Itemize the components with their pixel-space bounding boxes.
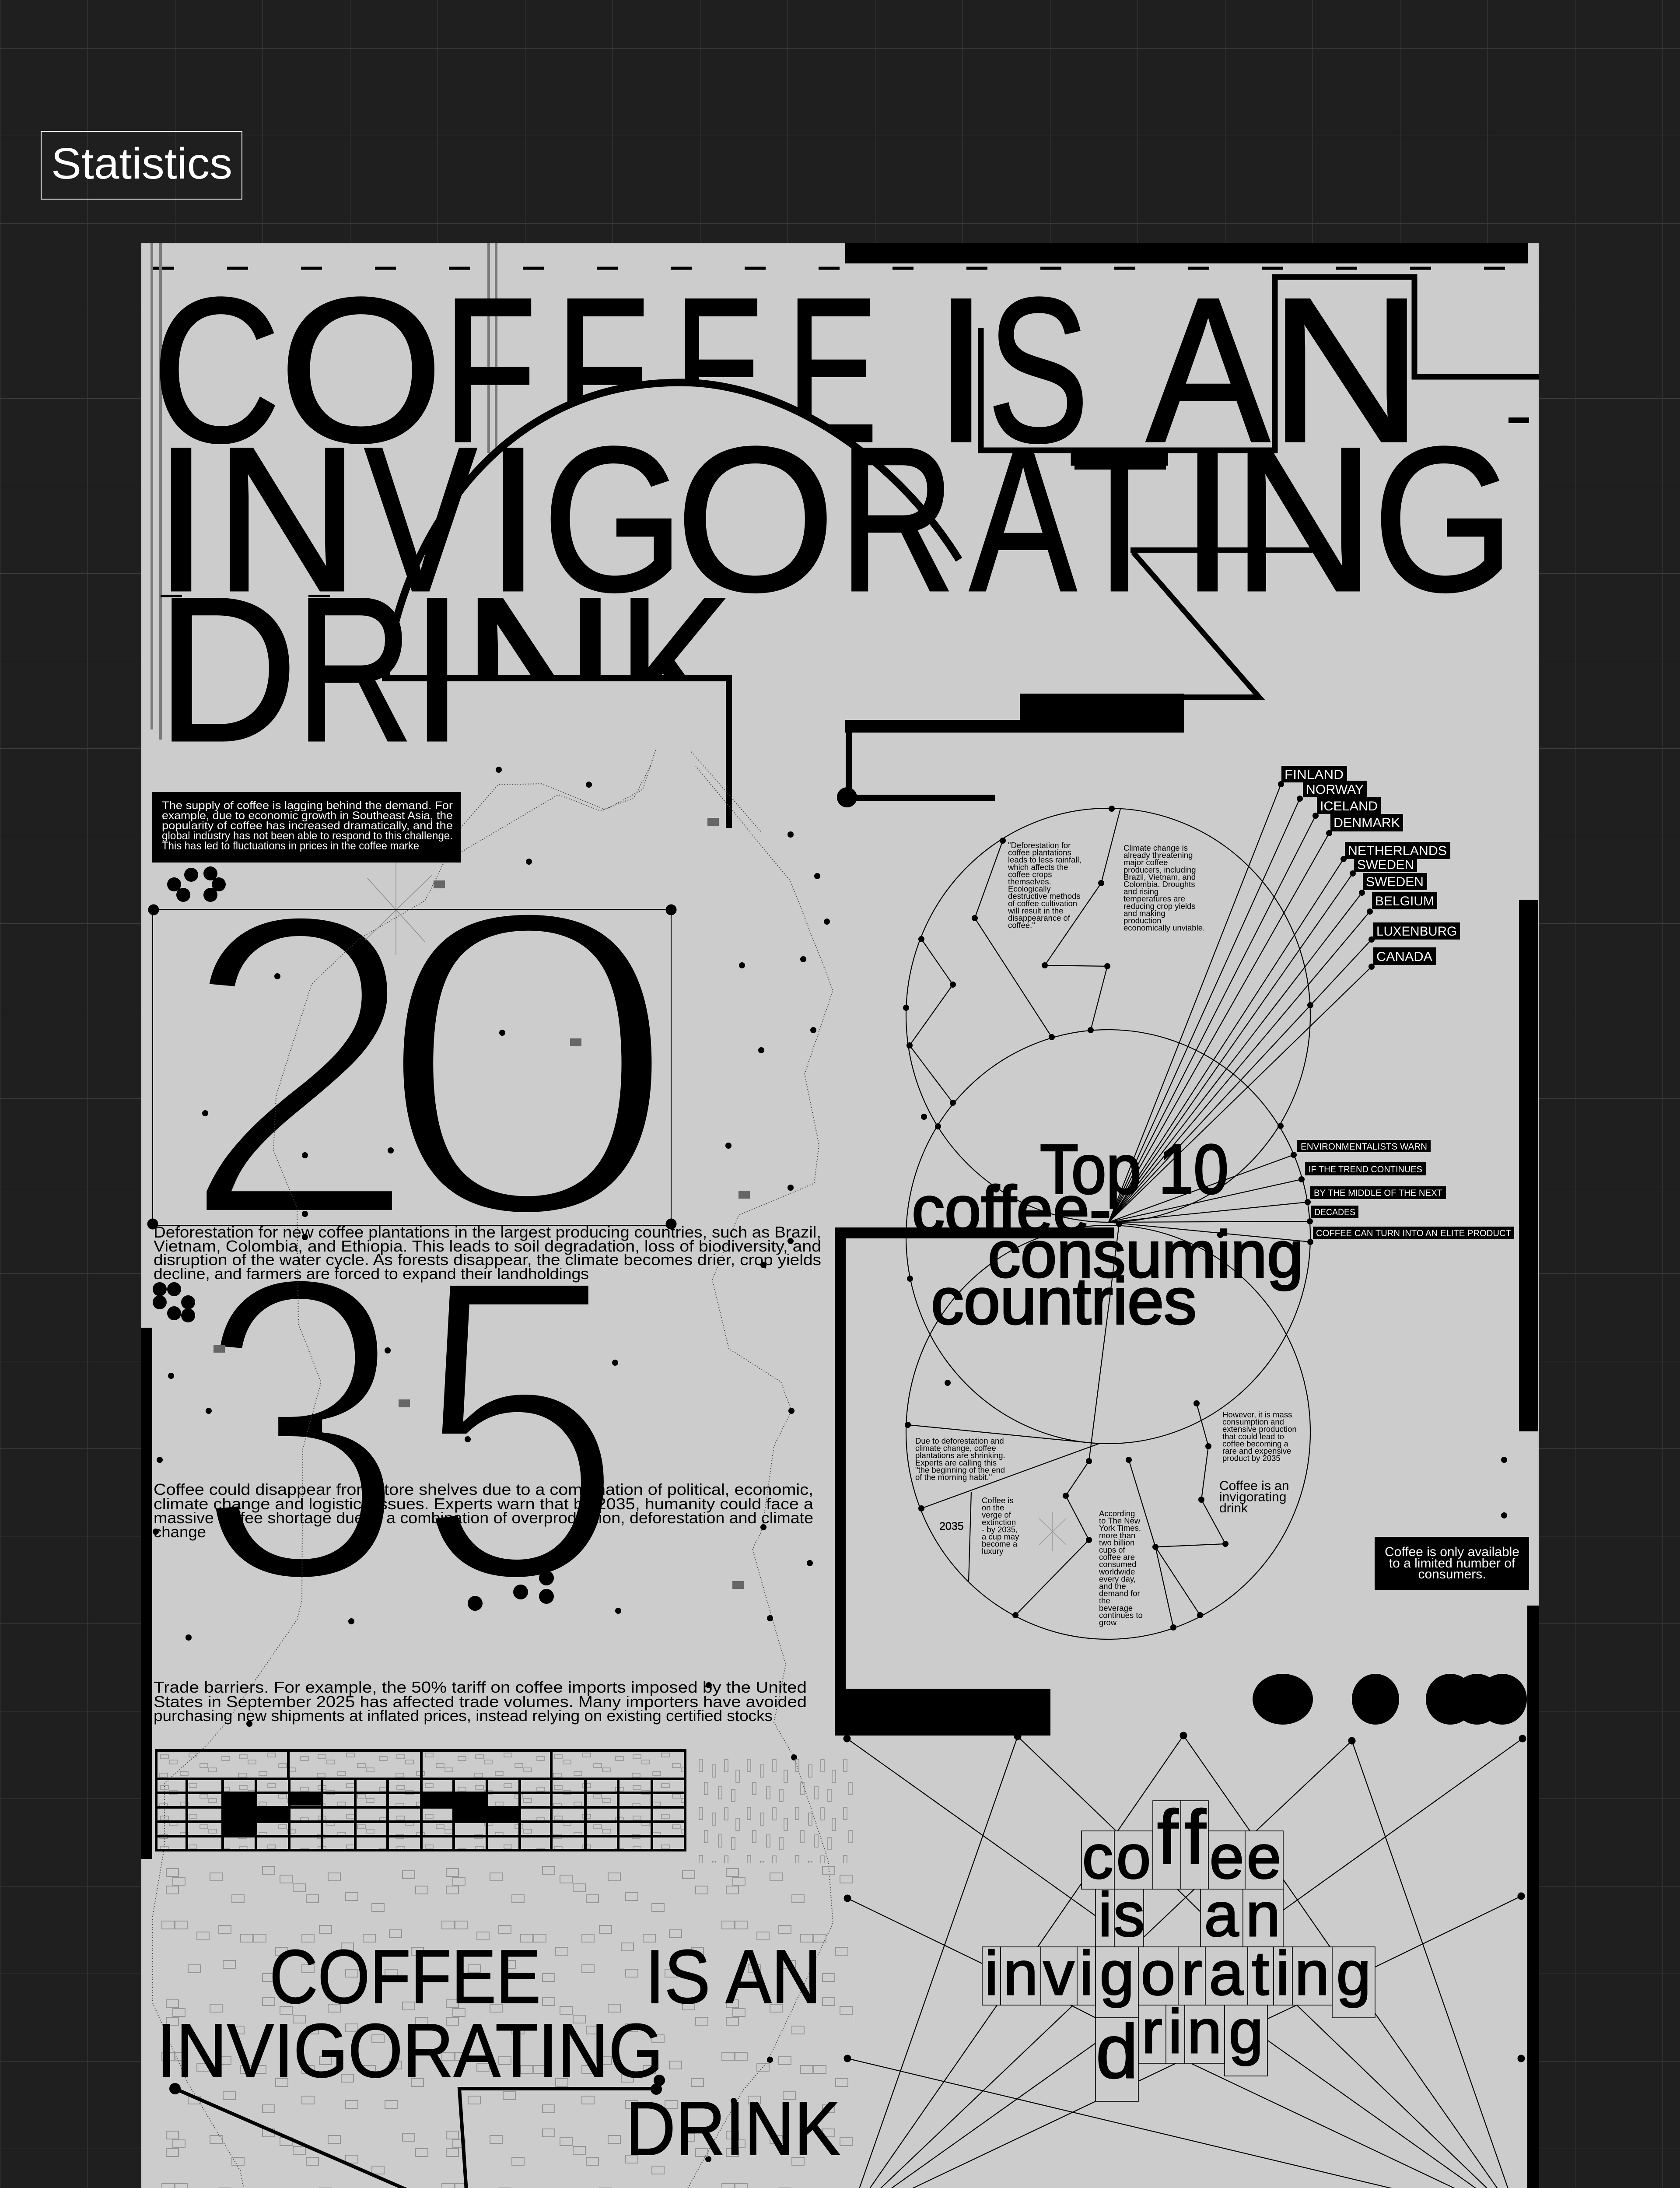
circle note: deforestation quote: themselves. bbox=[1008, 877, 1051, 886]
secondary title: INVIGORATING bbox=[157, 2008, 663, 2093]
text block: Coffee could disappear: change bbox=[154, 1523, 206, 1541]
circle note: climate change: Colombia. Droughts bbox=[1124, 880, 1195, 889]
circle note: 2035 extinction: become a bbox=[982, 1539, 1018, 1549]
callout: limited number of consumers: consumers. bbox=[1418, 1567, 1486, 1581]
word: dring: d bbox=[1096, 2009, 1138, 2094]
text block: supply of coffee: example, due to economic growth in Southeast Asia, the bbox=[162, 810, 453, 822]
circle note: New York Times: York Times, bbox=[1099, 1523, 1141, 1532]
fan lines to the country labels bbox=[1109, 784, 1372, 1242]
word: dring: i bbox=[1168, 1997, 1182, 2066]
circle note: mass consumption: consumption and bbox=[1222, 1417, 1284, 1427]
country labels: LUXENBURG bbox=[1376, 924, 1457, 939]
word: invigorating: r bbox=[1181, 1939, 1202, 2008]
three overlapping circles bbox=[906, 808, 1310, 1639]
secondary title: COFFEE bbox=[270, 1934, 541, 2019]
circle note: climate change: production bbox=[1124, 916, 1161, 925]
circle note: New York Times: continues to bbox=[1099, 1610, 1143, 1620]
heading: Top 10 coffee-consuming countries: countries bbox=[931, 1264, 1197, 1338]
text block: trade barriers bbox=[154, 1678, 807, 1725]
frame with corner dots around 20 bbox=[153, 909, 671, 1225]
text block: Deforestation: Deforestation for new coffee plantations in the largest producing countries, such as Brazil, bbox=[154, 1223, 821, 1241]
word: dring: r bbox=[1141, 1997, 1162, 2066]
title line 2: G bbox=[1373, 404, 1515, 635]
callout: limited number of consumers bbox=[1375, 1537, 1529, 1590]
country labels: SWEDEN bbox=[1357, 858, 1414, 872]
secondary title bbox=[157, 1934, 840, 2171]
circle note: 2035 extinction: 2035 bbox=[939, 1520, 964, 1532]
title construction lines bbox=[161, 277, 1539, 828]
circle note: New York Times: worldwide bbox=[1099, 1567, 1135, 1576]
circle note: deforestation quote: disappearance of bbox=[1008, 913, 1071, 922]
word: is an: i bbox=[1098, 1880, 1112, 1950]
heading: Top 10 coffee-consuming countries: coffee- bbox=[912, 1172, 1111, 1246]
text block: Coffee could disappear: Coffee could disappear from store shelves due to a combination of political, economic, bbox=[154, 1480, 813, 1498]
word: is an: s bbox=[1114, 1880, 1144, 1950]
word: coffee: o bbox=[1116, 1822, 1151, 1892]
panel: main grey poster bbox=[141, 243, 1539, 2188]
cover below DRINK bbox=[448, 678, 746, 753]
word: invigorating: v bbox=[1043, 1939, 1074, 2008]
circle note: deforestation quote: which affects the bbox=[1008, 863, 1068, 872]
text block: supply of coffee: global industry has not been able to respond to this challenge. bbox=[162, 830, 453, 842]
circle note: climate change: and making bbox=[1124, 908, 1166, 918]
title line 2: I bbox=[486, 405, 540, 634]
circle note: plantations shrinking: plantations are shrinking. bbox=[915, 1451, 1005, 1460]
section label: Statistics: Statistics bbox=[51, 139, 232, 188]
word: is an bbox=[1096, 1880, 1283, 1950]
word: dring: n bbox=[1187, 1997, 1222, 2066]
word: invigorating: g bbox=[1100, 1939, 1134, 2008]
word: coffee bbox=[1082, 1794, 1283, 1892]
text block: Deforestation: disruption of the water cycle. As forests disappear, the climate becomes drier, crop yields bbox=[154, 1251, 821, 1269]
circle note: New York Times: cups of bbox=[1099, 1545, 1126, 1554]
word: invigorating: i bbox=[984, 1939, 998, 2008]
word: invigorating: n bbox=[1004, 1939, 1038, 2008]
country labels bbox=[1281, 766, 1460, 965]
word: invigorating: g bbox=[1337, 1939, 1371, 2008]
title line 2: V bbox=[364, 405, 478, 635]
circle note: deforestation quote: will result in the bbox=[1008, 906, 1063, 915]
text block: Deforestation bbox=[154, 1223, 821, 1283]
circle note: New York Times: and the bbox=[1099, 1581, 1126, 1591]
word: coffee: f bbox=[1157, 1794, 1179, 1879]
word: invigorating: i bbox=[1276, 1939, 1290, 2008]
circle note: New York Times: consumed bbox=[1099, 1560, 1136, 1569]
arc shape covering the title bbox=[386, 382, 959, 678]
circle note: invigorating drink: drink bbox=[1219, 1501, 1248, 1515]
title line 1: F bbox=[443, 255, 536, 485]
word: invigorating: o bbox=[1141, 1939, 1175, 2008]
section label: Statistics bbox=[41, 131, 242, 199]
word: coffee: e bbox=[1210, 1822, 1244, 1892]
title line 2: I bbox=[154, 405, 208, 634]
title line 1: O bbox=[279, 255, 444, 485]
secondary title: IS AN bbox=[645, 1934, 821, 2019]
circle note: New York Times: two billion bbox=[1099, 1538, 1134, 1547]
title line 2 bbox=[154, 404, 1515, 635]
circle note: 2035 extinction: - by 2035, bbox=[982, 1525, 1018, 1534]
circle note: New York Times: more than bbox=[1099, 1531, 1135, 1540]
title line 3 bbox=[157, 554, 732, 784]
circle note: deforestation quote: leads to less rainfall, bbox=[1008, 855, 1082, 864]
title line 3: D bbox=[157, 555, 298, 784]
text block: trade barriers: purchasing new shipments at inflated prices, instead relying on existing certified stocks bbox=[154, 1707, 773, 1725]
circle note: plantations shrinking: "the beginning of the end bbox=[915, 1465, 1005, 1474]
circle note: New York Times: demand for bbox=[1099, 1589, 1140, 1598]
circle note: deforestation quote: coffee." bbox=[1008, 921, 1035, 930]
circle note: 2035 extinction: luxury bbox=[982, 1546, 1004, 1556]
circle note: deforestation quote: coffee crops bbox=[1008, 870, 1052, 879]
text block: supply of coffee bbox=[152, 792, 461, 863]
circle note: climate change: Climate change is bbox=[1124, 843, 1188, 852]
connector lines with dots bbox=[175, 2080, 659, 2188]
circle note: 2035 extinction: on the bbox=[982, 1503, 1004, 1512]
word: dring bbox=[1096, 1997, 1267, 2101]
country labels: NORWAY bbox=[1306, 782, 1364, 797]
title line 2: A bbox=[970, 404, 1077, 634]
word: invigorating: a bbox=[1209, 1939, 1244, 2008]
circle note: climate change: Brazil, Vietnam, and bbox=[1124, 872, 1196, 881]
five black ellipses bbox=[1253, 1674, 1527, 1725]
circle note: deforestation quote: Ecologically bbox=[1008, 884, 1051, 894]
dotted wandering lines bbox=[153, 749, 833, 2188]
circle note: climate change: temperatures are bbox=[1124, 894, 1185, 903]
warning labels bbox=[1297, 1140, 1514, 1239]
text block: trade barriers: States in September 2025 has affected trade volumes. Many importers have avoided bbox=[154, 1693, 807, 1711]
country labels: CANADA bbox=[1376, 950, 1432, 964]
big number 20 bbox=[178, 816, 683, 1310]
text block: Deforestation: decline, and farmers are forced to expand their landholdings bbox=[154, 1265, 589, 1283]
title line 2: R bbox=[839, 404, 955, 634]
text block: Deforestation: Vietnam, Colombia, and Ethiopia. This leads to soil degradation, loss of biodiversity, and bbox=[154, 1237, 821, 1255]
word: coffee: f bbox=[1185, 1794, 1206, 1879]
circle note: deforestation quote: "Deforestation for bbox=[1008, 841, 1071, 850]
text block: Coffee could disappear: massive coffee shortage due to a combination of overproduction, deforestation and climate bbox=[154, 1509, 813, 1527]
heading: Top 10 coffee-consuming countries: Top 10 bbox=[1040, 1130, 1228, 1208]
country labels: NETHERLANDS bbox=[1348, 844, 1447, 858]
title line 1: N bbox=[1269, 255, 1423, 485]
circle note: 2035 extinction bbox=[939, 1496, 1019, 1556]
text block: supply of coffee: The supply of coffee is lagging behind the demand. For bbox=[162, 799, 453, 812]
warning labels: BY THE MIDDLE OF THE NEXT bbox=[1314, 1188, 1442, 1198]
small rectangle noise fields bbox=[153, 1757, 854, 2188]
circle note: mass consumption: product by 2035 bbox=[1222, 1454, 1281, 1463]
decorative asterisk bbox=[365, 862, 432, 955]
circle note: climate change: reducing crop yields bbox=[1124, 901, 1196, 911]
circle note: deforestation quote: destructive methods bbox=[1008, 891, 1081, 901]
big number 35 bbox=[194, 1184, 626, 1673]
title line 1: I bbox=[934, 256, 988, 485]
title line 1: F bbox=[556, 255, 649, 485]
network lines around the letter grid bbox=[847, 1736, 1522, 2188]
circle note: plantations shrinking: Due to deforestation and bbox=[915, 1436, 1004, 1445]
heading: Top 10 coffee-consuming countries bbox=[912, 1130, 1303, 1338]
top black bar and dashes bbox=[152, 243, 1528, 740]
circle note: invigorating drink: invigorating bbox=[1219, 1490, 1286, 1504]
big number 20: 2 bbox=[178, 821, 421, 1310]
circle note: 2035 extinction: verge of bbox=[982, 1510, 1012, 1519]
title line 1: A bbox=[1146, 255, 1270, 485]
circle note: New York Times: According bbox=[1099, 1509, 1135, 1518]
text block: supply of coffee: This has led to fluctuations in prices in the coffee marke bbox=[162, 840, 419, 852]
circle note: plantations shrinking: of the morning habit." bbox=[915, 1473, 992, 1482]
circle note: New York Times: the bbox=[1099, 1596, 1110, 1605]
word: dring: g bbox=[1229, 1997, 1263, 2066]
circle note: New York Times: beverage bbox=[1099, 1603, 1133, 1613]
title line 3: K bbox=[617, 554, 732, 784]
circle note: mass consumption: that could lead to bbox=[1222, 1432, 1284, 1441]
big number 20: 0 bbox=[371, 816, 683, 1309]
circle note: 2035 extinction: Coffee is bbox=[982, 1496, 1014, 1505]
circle note: New York Times: coffee are bbox=[1099, 1553, 1135, 1562]
circle note: mass consumption: However, it is mass bbox=[1222, 1410, 1292, 1419]
circle note: New York Times: to The New bbox=[1099, 1516, 1141, 1525]
title line 3: I bbox=[410, 555, 464, 784]
circle note: climate change: producers, including bbox=[1124, 865, 1196, 874]
circle note: plantations shrinking: climate change, coffee bbox=[915, 1444, 996, 1453]
word: invigorating bbox=[982, 1939, 1375, 2018]
country labels: FINLAND bbox=[1284, 768, 1344, 782]
title line 2: N bbox=[214, 404, 360, 634]
country labels: ICELAND bbox=[1320, 799, 1378, 813]
title line 3: N bbox=[461, 555, 617, 784]
warning labels: DECADES bbox=[1314, 1207, 1355, 1217]
word: coffee: e bbox=[1247, 1822, 1281, 1892]
circle note: mass consumption: rare and expensive bbox=[1222, 1446, 1291, 1455]
title line 1: C bbox=[152, 256, 281, 485]
word: is an: n bbox=[1246, 1880, 1280, 1950]
thick black frames bbox=[141, 900, 1539, 2188]
word: invigorating: i bbox=[1079, 1939, 1093, 2008]
circle note: New York Times: every day, bbox=[1099, 1574, 1136, 1583]
secondary title: DRINK bbox=[626, 2086, 840, 2171]
circle note: mass consumption: coffee becoming a bbox=[1222, 1439, 1289, 1448]
big number 35: 3 bbox=[194, 1184, 408, 1673]
circle note: deforestation quote: coffee plantations bbox=[1008, 848, 1071, 857]
title line 2: O bbox=[676, 404, 836, 634]
country labels: DENMARK bbox=[1334, 816, 1400, 830]
circle note: deforestation quote: of coffee cultivation bbox=[1008, 899, 1077, 908]
circle note: invigorating drink: Coffee is an bbox=[1219, 1479, 1289, 1493]
black blocks beside the title bbox=[837, 417, 1529, 807]
title line 2: G bbox=[542, 404, 684, 635]
word: invigorating: n bbox=[1295, 1939, 1329, 2008]
text block: trade barriers: Trade barriers. For example, the 50% tariff on coffee imports imposed by the United bbox=[154, 1678, 807, 1696]
circle note: plantations shrinking: Experts are calling this bbox=[915, 1458, 997, 1467]
country labels: BELGIUM bbox=[1375, 894, 1434, 908]
text block: Coffee could disappear bbox=[154, 1480, 814, 1541]
title line 1 bbox=[152, 255, 1423, 485]
title line 2: T bbox=[1068, 405, 1171, 635]
circle note: 2035 extinction: a cup may bbox=[982, 1532, 1019, 1541]
text block: Coffee could disappear: climate change and logistics issues. Experts warn that by 2035, humanity could face a bbox=[154, 1495, 814, 1513]
circle note: mass consumption: extensive production bbox=[1222, 1424, 1297, 1434]
calendar table bbox=[156, 1750, 685, 1850]
warning labels: IF THE TREND CONTINUES bbox=[1309, 1164, 1422, 1175]
circle note: 2035 extinction: extinction bbox=[982, 1518, 1016, 1527]
country labels: SWEDEN bbox=[1366, 875, 1424, 889]
word: is an: a bbox=[1204, 1880, 1239, 1950]
circle note: climate change: already threatening bbox=[1124, 851, 1193, 860]
word: invigorating: t bbox=[1252, 1939, 1269, 2008]
circle note: climate change: and rising bbox=[1124, 887, 1158, 896]
title line 1: E bbox=[787, 256, 878, 485]
big number 35: 5 bbox=[413, 1184, 626, 1673]
title line 2: N bbox=[1232, 404, 1375, 634]
heading: Top 10 coffee-consuming countries: consuming bbox=[988, 1217, 1303, 1291]
callout: limited number of consumers: to a limited number of bbox=[1389, 1556, 1516, 1571]
circle note: New York Times: grow bbox=[1099, 1618, 1117, 1627]
title line 2: I bbox=[1180, 405, 1235, 634]
text block: supply of coffee: popularity of coffee has increased dramatically, and the bbox=[162, 820, 453, 832]
warning labels: COFFEE CAN TURN INTO AN ELITE PRODUCT bbox=[1316, 1228, 1511, 1238]
letter grid: coffee is an invigorating drink bbox=[982, 1794, 1375, 2101]
callout: limited number of consumers: Coffee is only available bbox=[1385, 1545, 1519, 1559]
title line 1: S bbox=[987, 255, 1089, 485]
scattered black dots bbox=[156, 770, 827, 2159]
title line 1: E bbox=[675, 256, 765, 485]
circle note: climate change: economically unviable. bbox=[1124, 923, 1205, 933]
connected node network bbox=[906, 784, 1504, 1627]
circle note: climate change: major coffee bbox=[1124, 858, 1168, 867]
word: coffee: c bbox=[1082, 1822, 1113, 1892]
warning labels: ENVIRONMENTALISTS WARN bbox=[1301, 1142, 1427, 1152]
title line 3: R bbox=[296, 554, 413, 784]
